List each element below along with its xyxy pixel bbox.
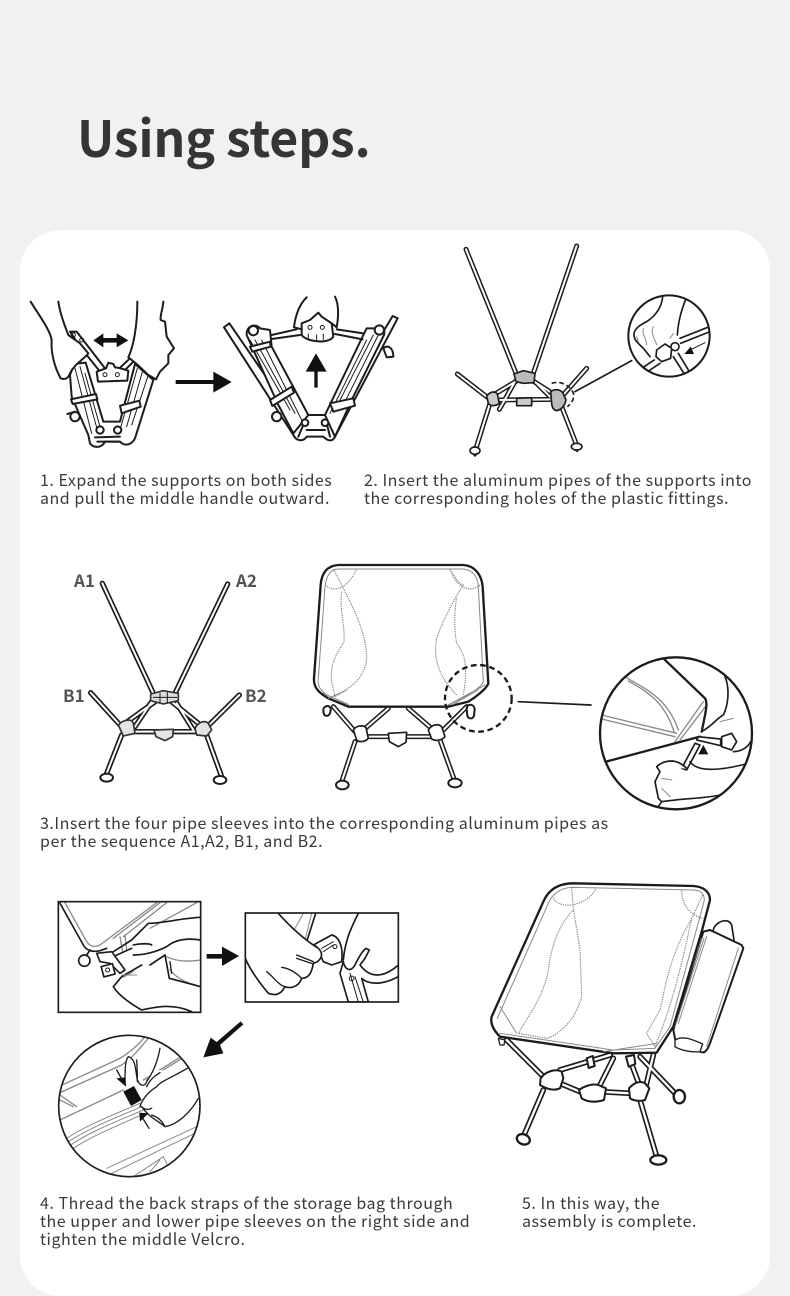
frame with aluminum pipes xyxy=(457,246,587,456)
step 2 text: the corresponding holes of the plastic fittings. xyxy=(364,485,729,509)
box: pulling strap xyxy=(245,913,398,1002)
chair xyxy=(314,565,488,789)
figure: hands expanding supports xyxy=(31,302,174,447)
label B1: B1 xyxy=(63,682,85,707)
step 3 frame diagram xyxy=(91,583,239,784)
step 4 illustrations xyxy=(58,902,398,1177)
step 3 text: 3.Insert the four pipe sleeves into the corresponding aluminum pipes as xyxy=(40,810,609,834)
arrow: up xyxy=(306,353,327,388)
arrow: right xyxy=(207,947,239,966)
detail circle xyxy=(600,657,752,810)
chair frame xyxy=(498,1038,685,1165)
storage bag xyxy=(672,921,743,1052)
step 5 text: assembly is complete. xyxy=(522,1208,697,1232)
label B2: B2 xyxy=(245,682,267,707)
arrow: large right xyxy=(176,372,232,393)
dashed callout ring xyxy=(445,665,512,732)
step 4 text: tighten the middle Velcro. xyxy=(40,1226,245,1250)
detail circle: velcro xyxy=(58,1035,200,1177)
connector line xyxy=(518,702,591,705)
chair seat xyxy=(491,883,710,1053)
step 4 text: 4. Thread the back straps of the storage bag through xyxy=(40,1190,453,1214)
connector line xyxy=(575,361,632,392)
figure: pulled middle handle xyxy=(224,297,398,440)
dashed callout ring xyxy=(552,382,574,407)
detail circle xyxy=(628,295,710,377)
label A2: A2 xyxy=(235,567,257,592)
step 3 text: per the sequence A1,A2, B1, and B2. xyxy=(40,828,323,852)
step 5 illustration: assembled chair with bag xyxy=(491,883,743,1165)
title: Using steps. xyxy=(77,100,370,172)
step 2 text: 2. Insert the aluminum pipes of the supports into xyxy=(364,467,752,491)
box: threading strap xyxy=(58,902,201,1012)
step 2 illustration xyxy=(457,246,710,456)
step 1 text: 1. Expand the supports on both sides xyxy=(40,467,332,491)
arrow: double horizontal xyxy=(93,333,128,347)
step 5 text: 5. In this way, the xyxy=(522,1190,660,1214)
step 1 text: and pull the middle handle outward. xyxy=(40,485,330,509)
step 4 text: the upper and lower pipe sleeves on the right side and xyxy=(40,1208,470,1232)
step 1 illustration xyxy=(31,297,398,447)
step 3 chair and detail xyxy=(314,565,752,810)
arrow: diagonal xyxy=(203,1021,243,1057)
label A1: A1 xyxy=(73,567,95,592)
white panel xyxy=(20,230,770,1296)
